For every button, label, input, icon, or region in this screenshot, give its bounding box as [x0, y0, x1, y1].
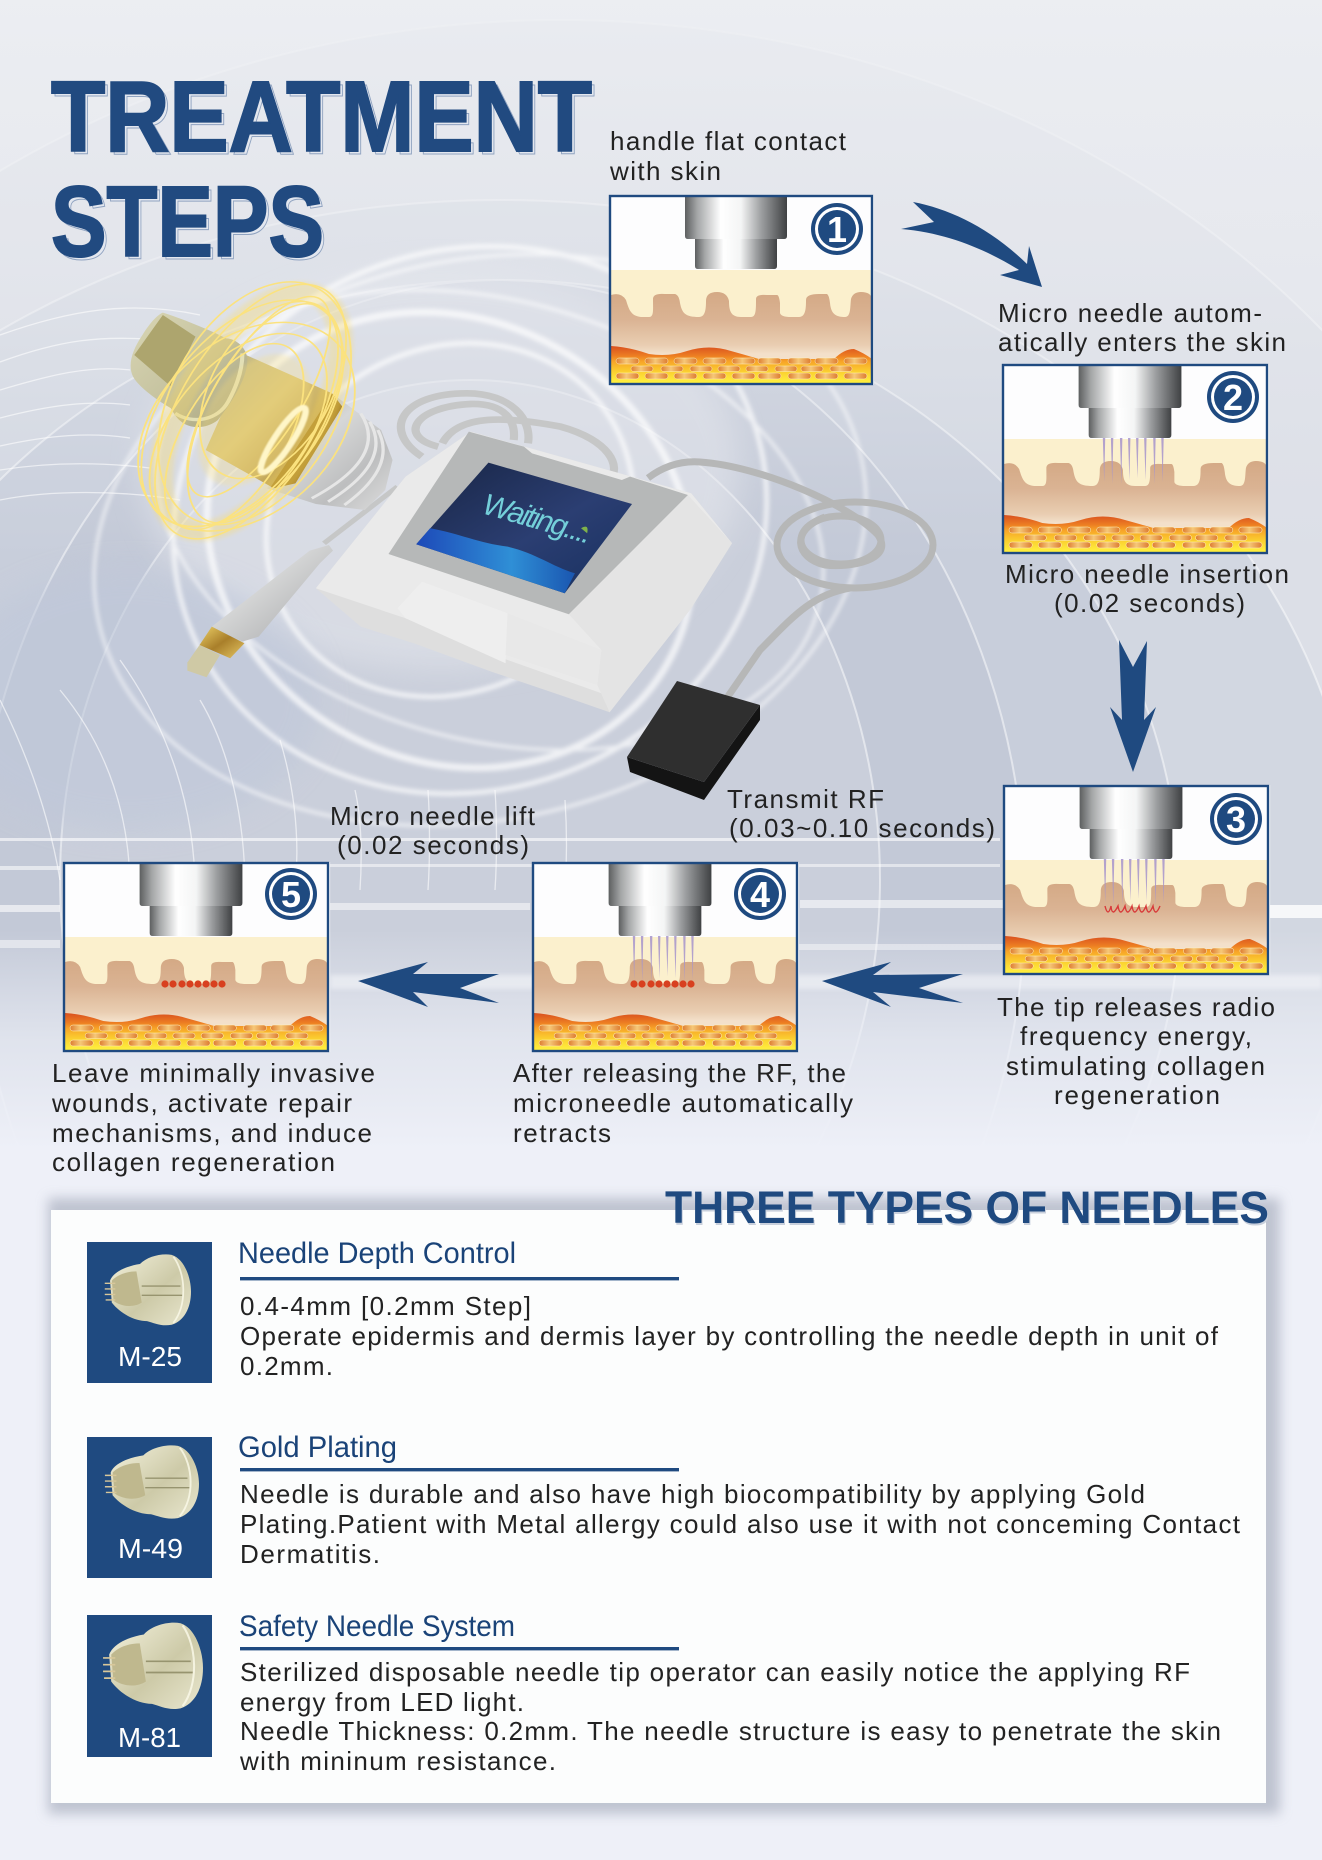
step 1 caption: with skin — [609, 156, 721, 186]
step 2 caption top: Micro needle autom- — [998, 298, 1262, 328]
arrow: step 3 to step 4 — [822, 962, 963, 1007]
needle depth control block: Needle Depth Control — [238, 1237, 516, 1270]
gold plating block — [238, 1431, 1241, 1569]
safety needle system block: Safety Needle System — [239, 1610, 515, 1643]
screen text: waiting: Waiting.... — [479, 488, 596, 551]
needle depth control block: Operate epidermis and dermis layer by controlling the needle depth in unit of — [240, 1321, 1219, 1351]
gold plating block: Dermatitis. — [240, 1539, 380, 1569]
step 2 caption bottom: Micro needle insertion — [1005, 559, 1289, 589]
step 3 caption: stimulating collagen — [1006, 1051, 1265, 1081]
gold plating block: Needle is durable and also have high biocompatibility by applying Gold — [240, 1479, 1145, 1509]
step 5 caption: mechanisms, and induce — [52, 1118, 372, 1148]
gold plating block: Gold Plating — [238, 1431, 397, 1464]
step 5 caption: Leave minimally invasive — [52, 1058, 375, 1088]
step 2 panel — [1002, 364, 1269, 554]
step 2 caption top — [998, 298, 1286, 357]
step 4 panel — [532, 862, 799, 1052]
step 5 caption: wounds, activate repair — [51, 1088, 352, 1118]
step 2 caption top: atically enters the skin — [998, 327, 1286, 357]
step 4 caption: After releasing the RF, the — [513, 1058, 846, 1088]
needle depth control block: 0.4-4mm [0.2mm Step] — [240, 1291, 531, 1321]
step 4 panel: 4 — [750, 874, 770, 915]
transmit RF caption — [727, 784, 995, 843]
step 3 caption — [997, 992, 1275, 1110]
step 3 caption: regeneration — [1054, 1080, 1220, 1110]
micro needle lift caption: (0.02 seconds) — [337, 830, 529, 860]
safety needle system block: Needle Thickness: 0.2mm. The needle structure is easy to penetrate the skin — [240, 1716, 1221, 1746]
needle M-81 tile: M-81 — [118, 1722, 181, 1753]
safety needle system block: with mininum resistance. — [239, 1746, 556, 1776]
arrow: step 2 to step 3 — [1110, 640, 1156, 772]
needle M-81 tile — [87, 1615, 212, 1757]
footswitch — [627, 681, 760, 800]
transmit RF caption: Transmit RF — [727, 784, 884, 814]
cables to footswitch — [648, 462, 933, 705]
title: treatment steps — [51, 61, 595, 281]
panel: three types of needles — [48, 1182, 1280, 1814]
step 5 panel — [63, 862, 330, 1052]
step 4 caption: microneedle automatically — [513, 1088, 853, 1118]
step 5 caption — [51, 1058, 375, 1177]
gold plating block: Plating.Patient with Metal allergy could also use it with not conceming Contact — [240, 1509, 1241, 1539]
safety needle system block — [239, 1610, 1221, 1776]
step 3 caption: frequency energy, — [1020, 1021, 1252, 1051]
step 2 caption bottom: (0.02 seconds) — [1054, 588, 1245, 618]
step 5 caption: collagen regeneration — [52, 1147, 335, 1177]
control unit — [316, 432, 732, 712]
title: treatment steps: TREATMENT — [54, 64, 595, 176]
step 1 panel: 1 — [827, 209, 847, 250]
step 2 caption bottom — [1005, 559, 1289, 618]
needle depth control block — [238, 1237, 1219, 1381]
title: treatment steps: STEPS — [51, 166, 324, 278]
micro needle lift caption: Micro needle lift — [330, 801, 536, 831]
needle M-49 tile: M-49 — [118, 1533, 183, 1564]
step 3 panel — [1003, 785, 1270, 975]
device cables — [324, 393, 614, 543]
handpiece with cartridge — [131, 313, 393, 510]
needle depth control block: 0.2mm. — [240, 1351, 333, 1381]
arrow: step 1 to step 2 — [901, 202, 1042, 287]
step 5 panel: 5 — [281, 874, 301, 915]
title: treatment steps: TREATMENT — [51, 61, 592, 173]
device illustration — [93, 260, 933, 800]
heading: three types of needles: THREE TYPES OF NEEDLES — [666, 1184, 1270, 1235]
step 1 caption — [609, 126, 847, 186]
step 3 panel: 3 — [1226, 799, 1246, 840]
step 1 caption: handle flat contact — [610, 126, 847, 156]
step 1 panel — [609, 195, 874, 385]
step 2 panel: 2 — [1223, 377, 1243, 418]
micro needle lift caption — [330, 801, 536, 860]
needle M-25 tile: M-25 — [118, 1341, 182, 1372]
pen handpiece — [187, 545, 333, 677]
needle M-49 tile — [87, 1437, 212, 1578]
step 3 caption: The tip releases radio — [997, 992, 1275, 1022]
needle M-25 tile — [87, 1242, 212, 1383]
safety needle system block: Sterilized disposable needle tip operator can easily notice the applying RF — [240, 1657, 1190, 1687]
title: treatment steps: STEPS — [54, 169, 327, 281]
step 4 caption: retracts — [513, 1118, 611, 1148]
step 4 caption — [513, 1058, 853, 1148]
safety needle system block: energy from LED light. — [240, 1687, 524, 1717]
energy rings — [93, 260, 400, 563]
arrow: step 4 to step 5 — [358, 962, 499, 1007]
transmit RF caption: (0.03~0.10 seconds) — [729, 813, 995, 843]
heading: three types of needles: THREE TYPES OF NEEDLES — [665, 1182, 1269, 1233]
